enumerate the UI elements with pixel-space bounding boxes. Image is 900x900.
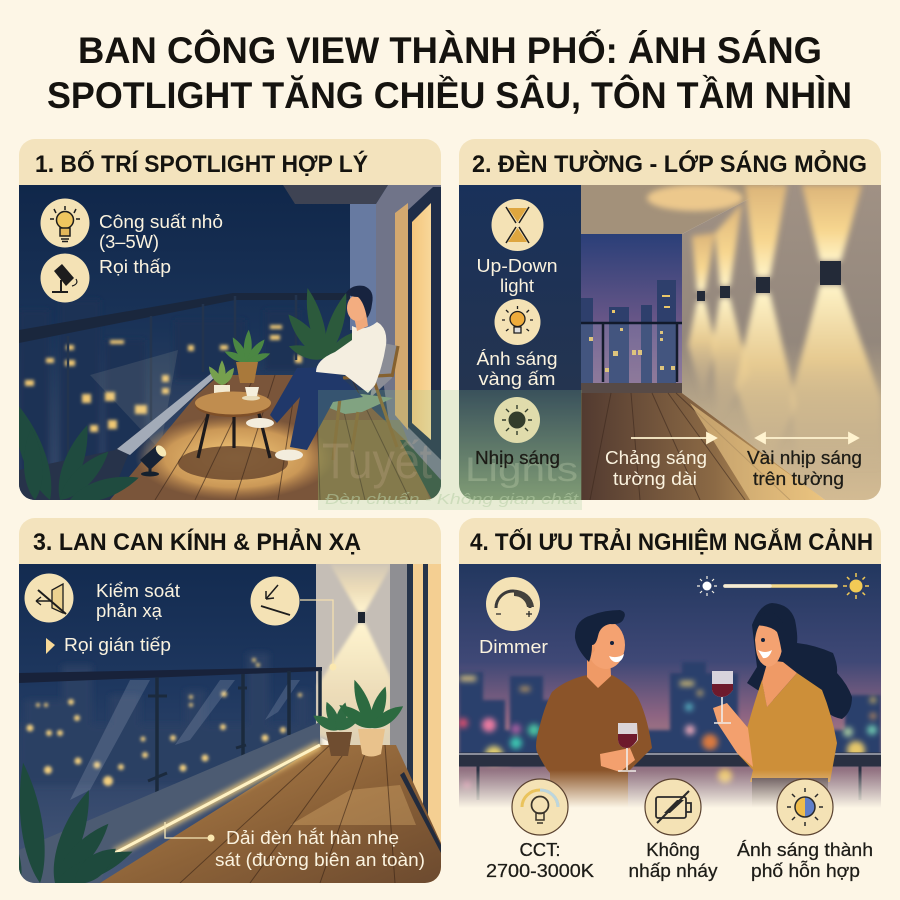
text: mixed city light: phố hỗn hợp (751, 860, 860, 881)
wall (682, 185, 881, 500)
text: strip label: Dải đèn hắt hàn nhẹ (226, 827, 399, 848)
text: low aim: Rọi thấp (99, 256, 171, 277)
table (195, 387, 271, 458)
small potted plant (209, 360, 234, 385)
text: small wattage: Công suất nhỏ (99, 211, 223, 232)
text: reflection control (96, 580, 180, 621)
heading: panel 3: 3. LAN CAN KÍNH & PHẢN XẠ (33, 527, 361, 556)
tall plant (288, 288, 352, 360)
text: small wattage: (3–5W) (99, 231, 159, 252)
text: warm light: Ánh sáng (476, 348, 558, 369)
illustration: railing and LED strip (0, 564, 441, 892)
text: up-down light: Up-Down (476, 255, 558, 276)
text: CCT (486, 839, 595, 881)
text: dimmer: Dimmer (479, 636, 548, 657)
railing (19, 667, 322, 800)
watermark (318, 390, 582, 510)
text: long wall: tường dài (613, 468, 697, 489)
text: reflection control: phản xạ (96, 600, 163, 621)
text: small wattage (99, 211, 223, 252)
plants (314, 702, 355, 731)
illustration: balcony with spotlight (3, 185, 441, 509)
glass railing (19, 293, 350, 420)
callout dot: strip (208, 834, 214, 842)
heading: panel 3 (19, 518, 441, 564)
floor (581, 393, 825, 500)
text: CCT: CCT: (519, 839, 561, 860)
illustration: couple on balcony (458, 564, 881, 814)
icon: mixed city light (777, 779, 833, 835)
title: SPOTLIGHT TĂNG CHIỀU SÂU, TÔN TẦM NHÌN (47, 74, 852, 116)
foliage lower left (19, 406, 138, 500)
icon: angle of light (250, 576, 300, 626)
panel: 1 spotlight placement (3, 139, 441, 509)
text: rhythm: Nhịp sáng (475, 447, 560, 468)
heading: panel 1: 1. BỐ TRÍ SPOTLIGHT HỢP LÝ (35, 150, 368, 178)
text: up-down light (476, 255, 558, 296)
man's wine glass (618, 723, 638, 771)
icon: no flicker (645, 779, 701, 835)
potted plant back (224, 330, 270, 362)
watermark: Đèn chuẩn - Không gian chất (325, 491, 579, 508)
wall fixtures (697, 261, 841, 301)
title (47, 29, 852, 116)
heading: panel 1 (19, 139, 441, 185)
icon: arrow marker (46, 638, 55, 654)
woman (713, 603, 852, 812)
spotlight fixture (140, 445, 166, 476)
chair (330, 344, 400, 460)
callout line: angle (300, 600, 336, 670)
panel: 3 glass railing (0, 518, 441, 892)
text: indirect: Rọi gián tiếp (64, 634, 171, 655)
side column (459, 185, 581, 500)
watermark: Lights (465, 451, 578, 489)
icon: up-down light (492, 199, 544, 251)
icon: low spot (40, 254, 90, 302)
text: warm light: vàng ấm (478, 368, 556, 389)
wall fixture (358, 612, 365, 623)
glass reflections (70, 680, 300, 800)
icon: CCT bulb (512, 779, 568, 835)
heading: panel 2: 2. ĐÈN TƯỜNG - LỚP SÁNG MỎNG (472, 149, 867, 178)
text: wall beats: Vài nhịp sáng (747, 447, 862, 468)
spotlight beam (90, 350, 178, 450)
arrow: wall rhythm (756, 433, 858, 443)
woman's wine glass (712, 671, 733, 723)
fade to background (459, 770, 881, 808)
wall and ceiling (350, 204, 376, 330)
icon: reflection control (24, 574, 74, 622)
text: long wall (605, 447, 707, 489)
man (536, 610, 652, 812)
LED strip (115, 745, 320, 853)
text: long wall: Chảng sáng (605, 447, 707, 468)
floor (100, 745, 441, 883)
text: CCT: 2700-3000K (486, 860, 595, 881)
wall (316, 564, 390, 742)
beams (685, 185, 881, 434)
arrow: long wall (631, 433, 716, 443)
heading: panel 4 (459, 518, 881, 564)
floor (110, 375, 441, 500)
person (246, 286, 386, 460)
icon: warm bulb (494, 299, 540, 345)
panel: 2 wall lights (459, 139, 881, 500)
text: strip label (215, 827, 425, 870)
text: no flicker (628, 839, 718, 881)
text: warm light (476, 348, 558, 389)
ledge (19, 722, 320, 885)
text: no flicker: nhấp nháy (628, 860, 718, 881)
text: no flicker: Không (646, 839, 700, 860)
icon: bulb (40, 198, 90, 248)
brightness slider (697, 573, 869, 599)
heading: panel 2 (459, 139, 881, 185)
callout line: strip (165, 822, 210, 838)
icon: sun rhythm (494, 397, 540, 443)
text: mixed city light: Ánh sáng thành (737, 839, 873, 860)
title: BAN CÔNG VIEW THÀNH PHỐ: ÁNH SÁNG (78, 29, 822, 71)
text: up-down light: light (500, 275, 534, 296)
watermark: Tuyết (322, 433, 432, 489)
panel: 4 viewing experience (458, 518, 881, 881)
text: wall beats: trên tường (753, 468, 844, 489)
city view (581, 234, 682, 393)
text: wall beats (747, 447, 862, 489)
text: reflection control: Kiểm soát (96, 580, 180, 601)
foliage lower left (19, 763, 132, 883)
text: strip label: sát (đường biên an toàn) (215, 849, 425, 870)
heading: panel 4: 4. TỐI ƯU TRẢI NGHIỆM NGẮM CẢNH (470, 527, 873, 556)
balcony rail (459, 754, 881, 800)
ledge (19, 373, 216, 500)
icon: dimmer (486, 577, 540, 631)
illustration: wall lights corridor (459, 185, 881, 500)
text: mixed city light (737, 839, 873, 881)
